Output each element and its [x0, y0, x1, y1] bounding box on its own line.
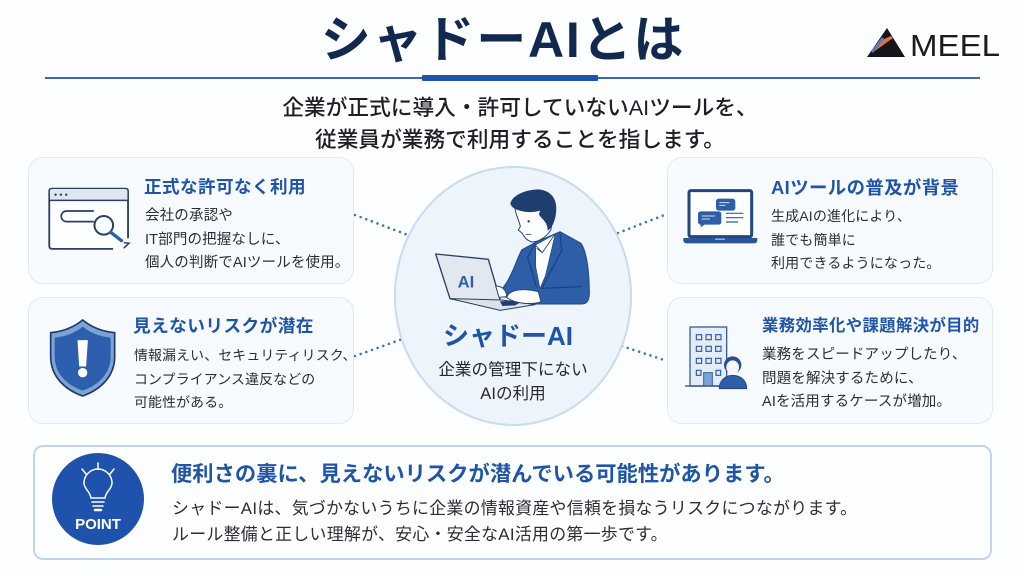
body: hidden risk: コンプライアンス違反などの	[134, 370, 315, 386]
panel: no permission	[28, 157, 354, 284]
body: shadow AI	[438, 360, 588, 402]
icon: laptop with chat	[683, 189, 758, 244]
heading: purpose: 業務効率化や課題解決が目的	[762, 317, 980, 335]
title: シャドーAIとは	[321, 12, 685, 68]
heading: no permission: 正式な許可なく利用	[144, 177, 306, 197]
subtitle: 従業員が業務で利用することを指します。	[315, 127, 725, 152]
title divider	[45, 77, 980, 79]
body: no permission	[145, 207, 349, 271]
badge: point	[52, 453, 144, 545]
heading: point: 便利さの裏に、見えないリスクが潜んでいる可能性があります。	[171, 462, 785, 486]
heading: background: AIツールの普及が背景	[771, 177, 959, 198]
body: purpose: 業務をスピードアップしたり、	[762, 347, 967, 363]
illustration: person at laptop: AI	[458, 272, 474, 291]
body: point	[172, 499, 857, 544]
body: hidden risk: 情報漏えい、セキュリティリスク、	[134, 347, 357, 363]
body: purpose: AIを活用するケースが増加。	[762, 394, 951, 410]
body: point: ルール整備と正しい理解が、安心・安全なAI活用の第一歩です。	[172, 525, 668, 544]
panel: point callout	[33, 445, 992, 560]
illustration: person at laptop	[435, 189, 590, 311]
body: no permission: 会社の承認や	[145, 208, 233, 224]
icon: light bulb	[81, 462, 115, 512]
body: purpose: 問題を解決するために、	[762, 370, 923, 386]
heading: shadow AI: シャドーAI	[443, 321, 573, 351]
body: background	[771, 208, 941, 271]
body: no permission: IT部門の把握なしに、	[145, 232, 290, 248]
label: point: POINT	[75, 516, 121, 533]
body: point: シャドーAIは、気づかないうちに企業の情報資産や信頼を損なうリスクにつながります。	[172, 499, 857, 518]
icon: building and person	[685, 326, 748, 390]
body: shadow AI: 企業の管理下にない	[438, 360, 588, 379]
icon: shield	[50, 318, 116, 397]
subtitle: 企業が正式に導入・許可していないAIツールを、	[282, 95, 758, 120]
body: background: 利用できるようになった。	[771, 255, 941, 271]
logo	[867, 28, 1000, 63]
body: hidden risk	[134, 347, 357, 410]
body: no permission: 個人の判断でAIツールを使用。	[145, 255, 349, 271]
heading: hidden risk: 見えないリスクが潜在	[133, 316, 314, 336]
panel: central circle	[394, 166, 632, 426]
body: background: 誰でも簡単に	[771, 232, 856, 248]
body: purpose	[762, 346, 967, 410]
body: background: 生成AIの進化により、	[771, 208, 911, 224]
icon: browser with magnifier	[48, 188, 131, 250]
subtitle	[282, 95, 758, 152]
body: hidden risk: 可能性がある。	[134, 394, 232, 410]
logo: MEEL	[910, 28, 1000, 63]
panel: hidden risk	[28, 297, 354, 424]
panel: purpose	[667, 297, 993, 424]
body: shadow AI: AIの利用	[480, 384, 546, 402]
panel: background	[667, 157, 993, 284]
